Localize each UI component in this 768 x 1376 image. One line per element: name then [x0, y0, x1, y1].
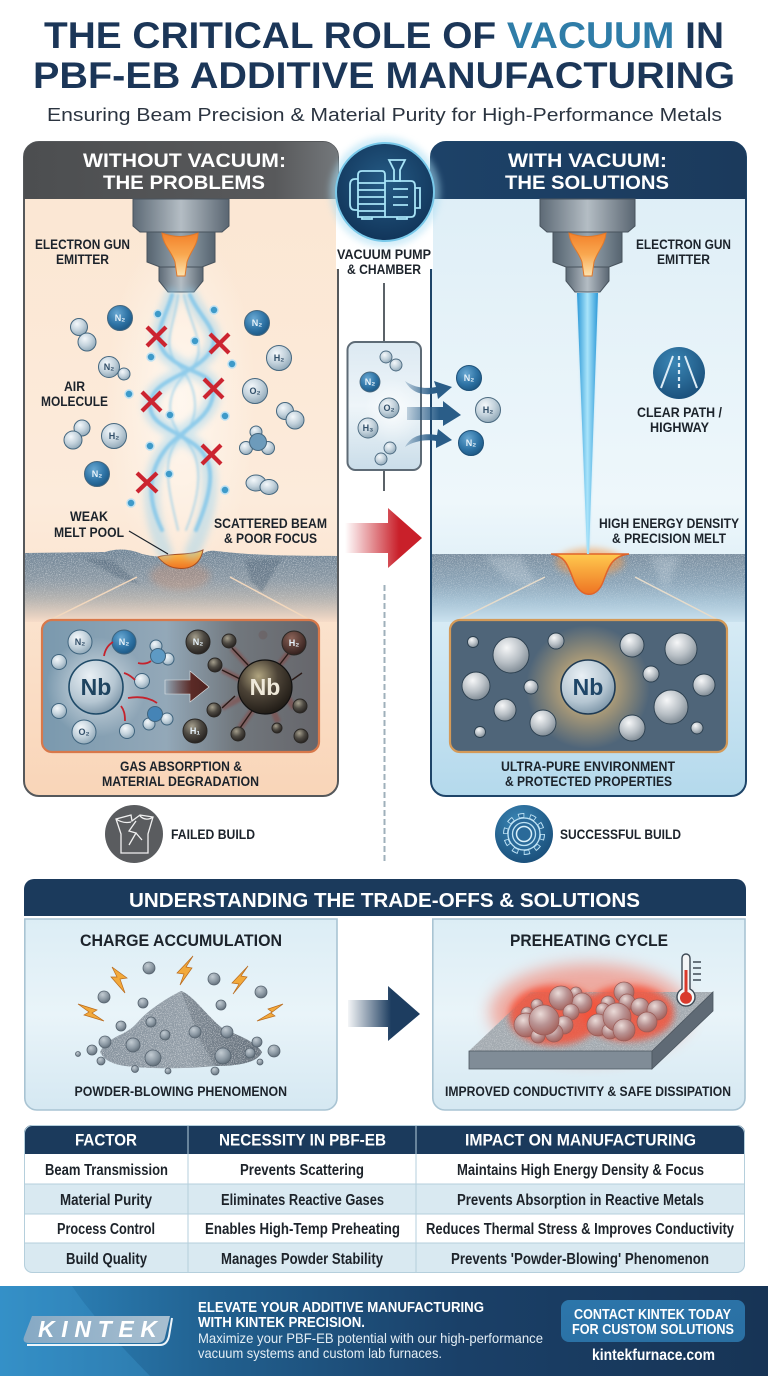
arrow: charge to preheat: [348, 986, 420, 1041]
header: without vacuum: THE PROBLEMS: [103, 173, 265, 194]
label: scattered beam: & POOR FOCUS: [224, 531, 317, 546]
table rows: Manages Powder Stability: [221, 1251, 383, 1268]
label: successful build: SUCCESSFUL BUILD: [560, 827, 681, 842]
label: clear path: HIGHWAY: [650, 420, 709, 435]
label: gas absorption: MATERIAL DEGRADATION: [102, 774, 259, 789]
label: air molecule: AIR: [64, 379, 85, 394]
label: gas absorption: [102, 759, 259, 789]
footer message: ELEVATE YOUR ADDITIVE MANUFACTURING: [198, 1300, 484, 1316]
atom: clean niobium: Nb: [81, 674, 111, 700]
heated powder spheres: [514, 982, 667, 1043]
label: vacuum pump: VACUUM PUMP: [337, 247, 431, 262]
vacuum chamber: O₂: [384, 403, 395, 413]
inset: gas absorption: N₂: [193, 637, 203, 647]
red collision crosses: [137, 327, 229, 492]
header: with vacuum: THE SOLUTIONS: [505, 173, 669, 194]
label: air molecule: MOLECULE: [41, 394, 108, 409]
table rows: Beam Transmission: [45, 1162, 168, 1179]
inset: gas absorption: O₂: [78, 727, 90, 737]
focused electron beam: [577, 293, 598, 554]
inset: gas absorption: H₁: [190, 726, 200, 736]
label: electron gun emitter right: [636, 237, 731, 267]
magnifier lines right: [458, 577, 718, 620]
atom: protected niobium: Nb: [573, 674, 603, 700]
table rows: Prevents 'Powder-Blowing' Phenomenon: [451, 1251, 709, 1268]
vacuum pump icon: [330, 137, 440, 247]
vacuum chamber: [348, 283, 421, 491]
panel: charge accumulation: [25, 919, 337, 1110]
table rows: Maintains High Energy Density & Focus: [457, 1162, 704, 1179]
table header: NECESSITY IN PBF-EB: [219, 1130, 386, 1150]
vacuum chamber: H₃: [363, 423, 373, 433]
table rows: Prevents Scattering: [240, 1162, 364, 1179]
table rows: Material Purity: [60, 1192, 152, 1209]
label: vacuum pump: & CHAMBER: [347, 262, 421, 277]
label: clear path: [637, 405, 722, 435]
contact button: FOR CUSTOM SOLUTIONS: [572, 1322, 734, 1338]
ejected gas molecules: [456, 366, 500, 456]
footer message: vacuum systems and custom lab furnaces.: [198, 1345, 442, 1361]
footer message: Maximize your PBF-EB potential with our high-performance: [198, 1330, 543, 1346]
air molecules: H₂: [109, 431, 119, 441]
inset: gas absorption: H₂: [289, 638, 299, 648]
vacuum chamber: N₂: [365, 377, 375, 387]
label: ultra-pure: [501, 759, 676, 789]
table rows: Build Quality: [66, 1251, 147, 1268]
air molecules: O₂: [250, 386, 261, 396]
air molecules: N₂: [104, 362, 114, 372]
label: scattered beam: [214, 516, 327, 546]
table header: FACTOR: [75, 1130, 137, 1150]
air molecules: N₂: [252, 318, 262, 328]
logo: kintek: KINTEK: [38, 1316, 158, 1342]
panel: with vacuum: [431, 142, 746, 796]
icon: failed build: [105, 805, 163, 863]
ground: powder bed: [432, 554, 745, 622]
table rows: Process Control: [57, 1221, 155, 1238]
absorption arrows: [104, 642, 157, 721]
scattered electron beam: [150, 295, 214, 552]
panel: charge accumulation: POWDER-BLOWING PHENOMENON: [74, 1084, 287, 1099]
atom: contaminated niobium: [238, 660, 292, 714]
dashed centre line: [384, 585, 386, 862]
table rows: Eliminates Reactive Gases: [221, 1192, 384, 1209]
table header: IMPACT ON MANUFACTURING: [465, 1130, 696, 1150]
label: ultra-pure: ULTRA-PURE ENVIRONMENT: [501, 759, 676, 774]
panel: without vacuum: [24, 142, 338, 796]
ground: powder bed: [24, 550, 338, 622]
panel: preheating cycle: PREHEATING CYCLE: [510, 932, 668, 950]
label: electron gun emitter left: [35, 237, 130, 267]
precision melt pool: [551, 554, 629, 594]
flying particles: [76, 962, 280, 1075]
inset: gas absorption: N₂: [75, 637, 85, 647]
icon: electron gun right: [540, 199, 635, 292]
header: without vacuum: [24, 142, 338, 199]
atom: clean niobium: [69, 660, 123, 714]
label: air molecule: [41, 379, 108, 409]
label: vacuum pump: [337, 247, 431, 277]
ejected gas molecules: N₂: [466, 438, 476, 448]
inset: gas absorption: [42, 620, 319, 752]
icon: thermometer: [677, 954, 701, 1006]
section header: trade-offs: UNDERSTANDING THE TRADE-OFFS & SOLUTIONS: [129, 889, 640, 912]
icon: electron gun left: [133, 199, 229, 292]
atom: contaminated niobium: Nb: [250, 674, 280, 700]
label: electron gun emitter right: EMITTER: [657, 252, 710, 267]
label: ultra-pure: & PROTECTED PROPERTIES: [505, 774, 672, 789]
arrows: gas evacuation: [405, 381, 461, 448]
label: electron gun emitter left: EMITTER: [56, 252, 109, 267]
title: [33, 15, 735, 96]
arrow: degradation: [165, 671, 209, 702]
lightning bolts: [78, 956, 283, 1021]
table rows: Prevents Absorption in Reactive Metals: [457, 1192, 704, 1209]
scattered electrons: [125, 306, 236, 507]
footer message: [198, 1300, 543, 1361]
label: high energy density: & PRECISION MELT: [612, 531, 727, 546]
label: electron gun emitter right: ELECTRON GUN: [636, 237, 731, 252]
panel: preheating cycle: IMPROVED CONDUCTIVITY & SAFE DISSIPATION: [445, 1084, 731, 1099]
arrow: red transition: [345, 508, 422, 568]
contamination stains: [222, 648, 294, 728]
label: clear path: CLEAR PATH /: [637, 405, 722, 420]
label: scattered beam: SCATTERED BEAM: [214, 516, 327, 531]
header: with vacuum: [431, 142, 746, 199]
air molecules: H₂: [274, 353, 284, 363]
inset: gas absorption: N₂: [119, 637, 129, 647]
label: weak melt pool: WEAK: [70, 509, 108, 524]
title: THE CRITICAL ROLE OF VACUUM IN: [44, 15, 724, 56]
powder pile: [100, 991, 262, 1068]
label: weak melt pool: MELT POOL: [54, 525, 124, 540]
air molecules: [64, 306, 304, 494]
heated plate: [469, 964, 713, 1069]
icon: successful build: [495, 805, 553, 863]
table rows: Enables High-Temp Preheating: [205, 1221, 400, 1238]
label: weak melt pool: [54, 509, 168, 554]
title: PBF-EB ADDITIVE MANUFACTURING: [33, 55, 735, 96]
footer message: WITH KINTEK PRECISION.: [198, 1315, 365, 1331]
contact button: CONTACT KINTEK TODAY: [574, 1307, 731, 1323]
subtitle: Ensuring Beam Precision & Material Purity for High-Performance Metals: [47, 104, 722, 125]
panel: preheating cycle: [433, 919, 745, 1110]
label: electron gun emitter left: ELECTRON GUN: [35, 237, 130, 252]
table rows: [24, 1125, 745, 1273]
section header: trade-offs: [24, 879, 746, 916]
header: without vacuum: WITHOUT VACUUM:: [83, 151, 286, 172]
comparison table: [24, 1125, 745, 1273]
ejected gas molecules: N₂: [464, 373, 474, 383]
label: high energy density: [599, 516, 739, 546]
magnifier lines left: [50, 577, 310, 620]
panel: charge accumulation: CHARGE ACCUMULATION: [80, 932, 282, 950]
air molecules: N₂: [115, 313, 125, 323]
ejected gas molecules: H₂: [483, 405, 493, 415]
label: failed build: FAILED BUILD: [171, 827, 255, 842]
table header: [24, 1125, 745, 1154]
inset: ultra-pure environment: [450, 620, 727, 752]
footer: [0, 1286, 768, 1376]
atom: protected niobium: [561, 660, 615, 714]
website: kintekfurnace.com: [592, 1347, 715, 1364]
pure metal spheres: [462, 633, 715, 741]
label: high energy density: HIGH ENERGY DENSITY: [599, 516, 739, 531]
white divider zone behind pump label: [336, 200, 433, 269]
header: with vacuum: WITH VACUUM:: [508, 151, 667, 172]
air molecules: N₂: [92, 469, 102, 479]
contact button: [561, 1300, 745, 1342]
weak melt pool: [150, 562, 210, 590]
icon: clear path highway: [653, 347, 705, 399]
label: gas absorption: GAS ABSORPTION &: [120, 759, 242, 774]
